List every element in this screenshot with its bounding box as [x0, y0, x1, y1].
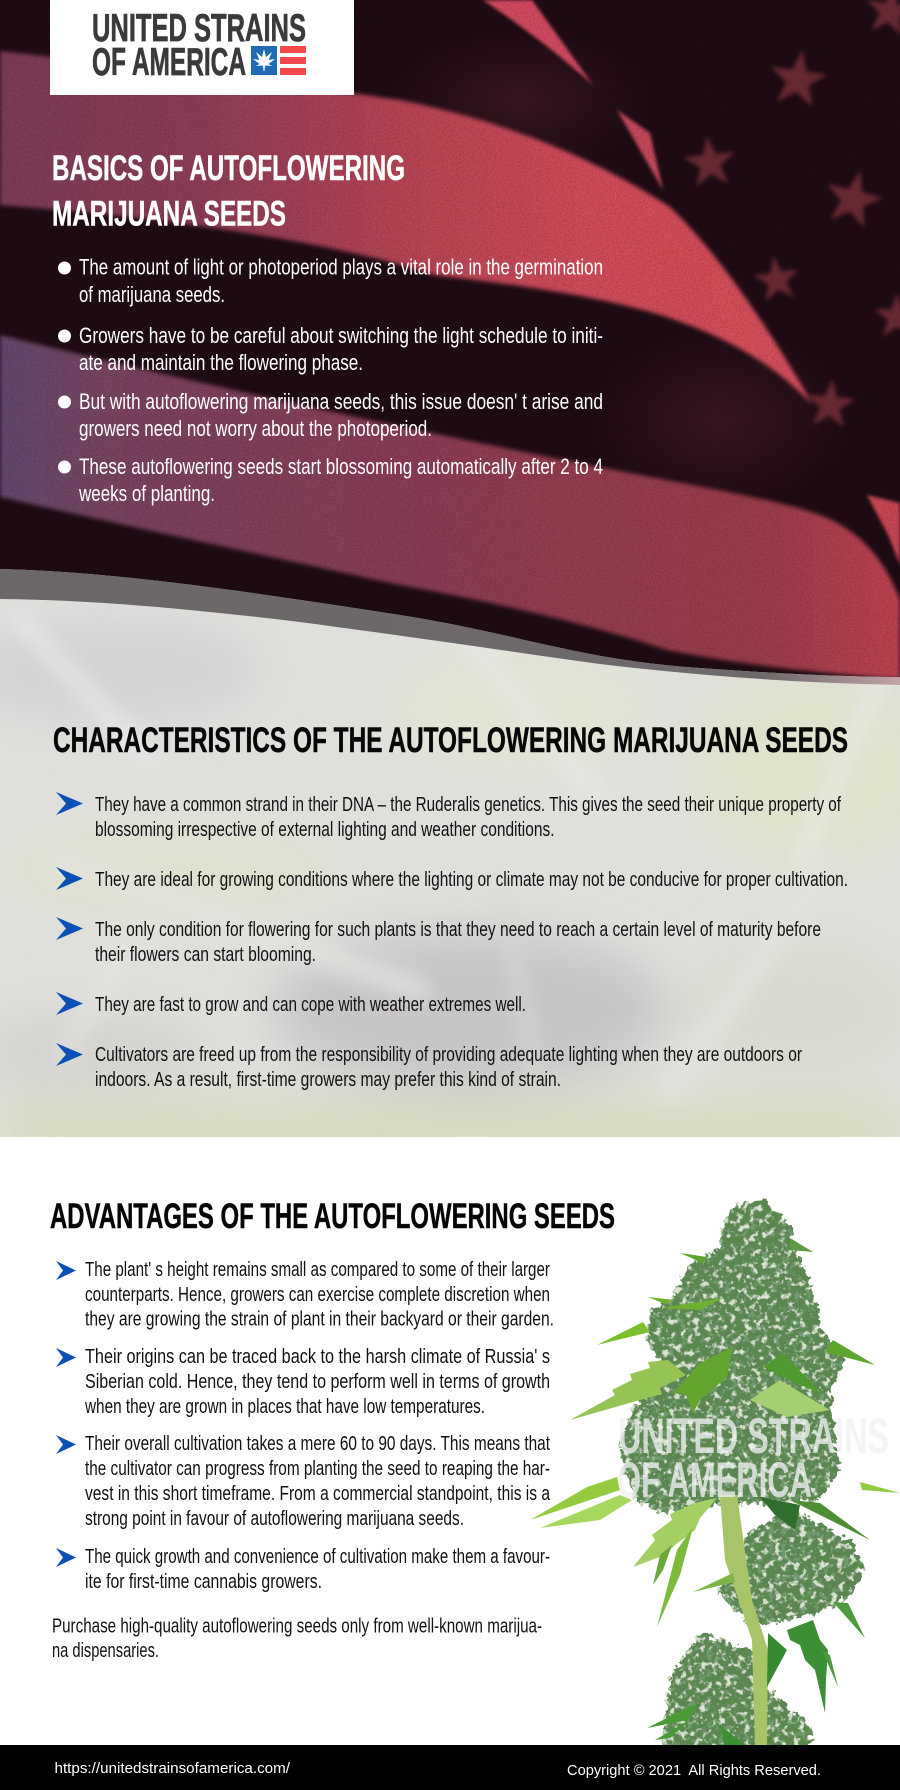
- advantage 1: they are growing the strain of plant in their backyard or their garden.: [85, 1308, 554, 1330]
- bullet 4: weeks of planting.: [78, 481, 215, 506]
- stem: [720, 1495, 768, 1745]
- bullet 4: [58, 454, 603, 506]
- advantage 2: Their origins can be traced back to the harsh climate of Russia' s: [85, 1345, 550, 1368]
- bullet 3: [58, 389, 603, 441]
- plant photo illustration: [530, 1200, 900, 1750]
- list: advantages: [52, 1258, 554, 1662]
- advantage 4: [56, 1545, 550, 1593]
- footer url: https://unitedstrainsofamerica.com/: [54, 1760, 291, 1777]
- advantage 1: counterparts. Hence, growers can exercise complete discretion when: [85, 1283, 550, 1306]
- heading: basics: [52, 149, 405, 234]
- advantage 2: Siberian cold. Hence, they tend to perform well in terms of growth: [85, 1370, 550, 1393]
- watermark over plant: [617, 1408, 889, 1508]
- panel: characteristics background photo: [0, 560, 900, 1155]
- bullet 1: [58, 254, 603, 307]
- advantage 3: [56, 1432, 550, 1530]
- footer copyright: Copyright © 2021 All Rights Reserved.: [567, 1762, 821, 1779]
- list: characteristics: [56, 792, 848, 1091]
- advantage 3: strong point in favour of autoflowering marijuana seeds.: [85, 1507, 464, 1530]
- advantage 2: [56, 1345, 550, 1418]
- bullet 2: [58, 323, 603, 375]
- logo panel: [50, 0, 354, 95]
- heading: basics: MARIJUANA SEEDS: [52, 194, 286, 234]
- flag stripe shard: [617, 110, 663, 190]
- logo wordmark: UNITED STRAINS: [92, 7, 306, 50]
- flag stars: [682, 0, 900, 428]
- heading: basics: BASICS OF AUTOFLOWERING: [52, 149, 405, 188]
- list: basics bullets: [58, 254, 603, 506]
- heading: advantages: ADVANTAGES OF THE AUTOFLOWERING SEEDS: [50, 1197, 615, 1236]
- bullet 1: The amount of light or photoperiod plays a vital role in the germination: [79, 254, 603, 280]
- panel: hero flag background: [0, 0, 900, 690]
- advantage 3: vest in this short timeframe. From a commercial standpoint, this is a: [85, 1482, 550, 1505]
- advantage 3: the cultivator can progress from planting the seed to reaping the har-: [85, 1457, 550, 1480]
- advantage 3: Their overall cultivation takes a mere 60 to 90 days. This means that: [85, 1432, 550, 1455]
- advantage 1: The plant' s height remains small as compared to some of their larger: [85, 1258, 550, 1281]
- flag stripe right edge: [867, 495, 900, 565]
- logo flag icon: [251, 46, 306, 75]
- item 1: blossoming irrespective of external lighting and weather conditions.: [95, 818, 554, 841]
- advantage 2: when they are grown in places that have low temperatures.: [84, 1395, 485, 1418]
- bullet 3: But with autoflowering marijuana seeds, this issue doesn' t arise and: [79, 389, 603, 414]
- advantage 4: The quick growth and convenience of cultivation make them a favour-: [85, 1545, 550, 1568]
- item 1: [56, 792, 841, 841]
- wave band divider: [0, 569, 900, 685]
- bullet 1: of marijuana seeds.: [79, 282, 225, 307]
- logo wordmark: OF AMERICA: [92, 41, 246, 84]
- buds: [620, 1200, 863, 1750]
- bullet 2: ate and maintain the flowering phase.: [79, 350, 363, 375]
- closing note: [52, 1614, 542, 1662]
- closing note: Purchase high-quality autoflowering seeds only from well-known marijua-: [52, 1614, 542, 1638]
- item 3: their flowers can start blooming.: [95, 943, 316, 966]
- advantage 4: ite for first-time cannabis growers.: [85, 1570, 322, 1593]
- flag stripe top streak: [483, 0, 593, 85]
- closing note: na dispensaries.: [52, 1639, 159, 1662]
- item 3: [56, 917, 821, 966]
- logo wordmark: [92, 7, 306, 84]
- advantage 1: [56, 1258, 554, 1330]
- item 4: [56, 992, 526, 1016]
- item 4: They are fast to grow and can cope with weather extremes well.: [95, 993, 526, 1016]
- bullet 2: Growers have to be careful about switching the light schedule to initi-: [79, 323, 603, 348]
- leaves: [530, 1238, 900, 1745]
- item 5: indoors. As a result, first-time growers may prefer this kind of strain.: [95, 1068, 561, 1091]
- flag stripe lower: [0, 335, 900, 679]
- footer bar: [0, 1745, 900, 1790]
- bullet 4: These autoflowering seeds start blossoming automatically after 2 to 4: [79, 454, 603, 479]
- flag stripe upper: [0, 51, 813, 405]
- bullet 3: growers need not worry about the photoperiod.: [79, 416, 432, 441]
- item 5: [56, 1043, 802, 1091]
